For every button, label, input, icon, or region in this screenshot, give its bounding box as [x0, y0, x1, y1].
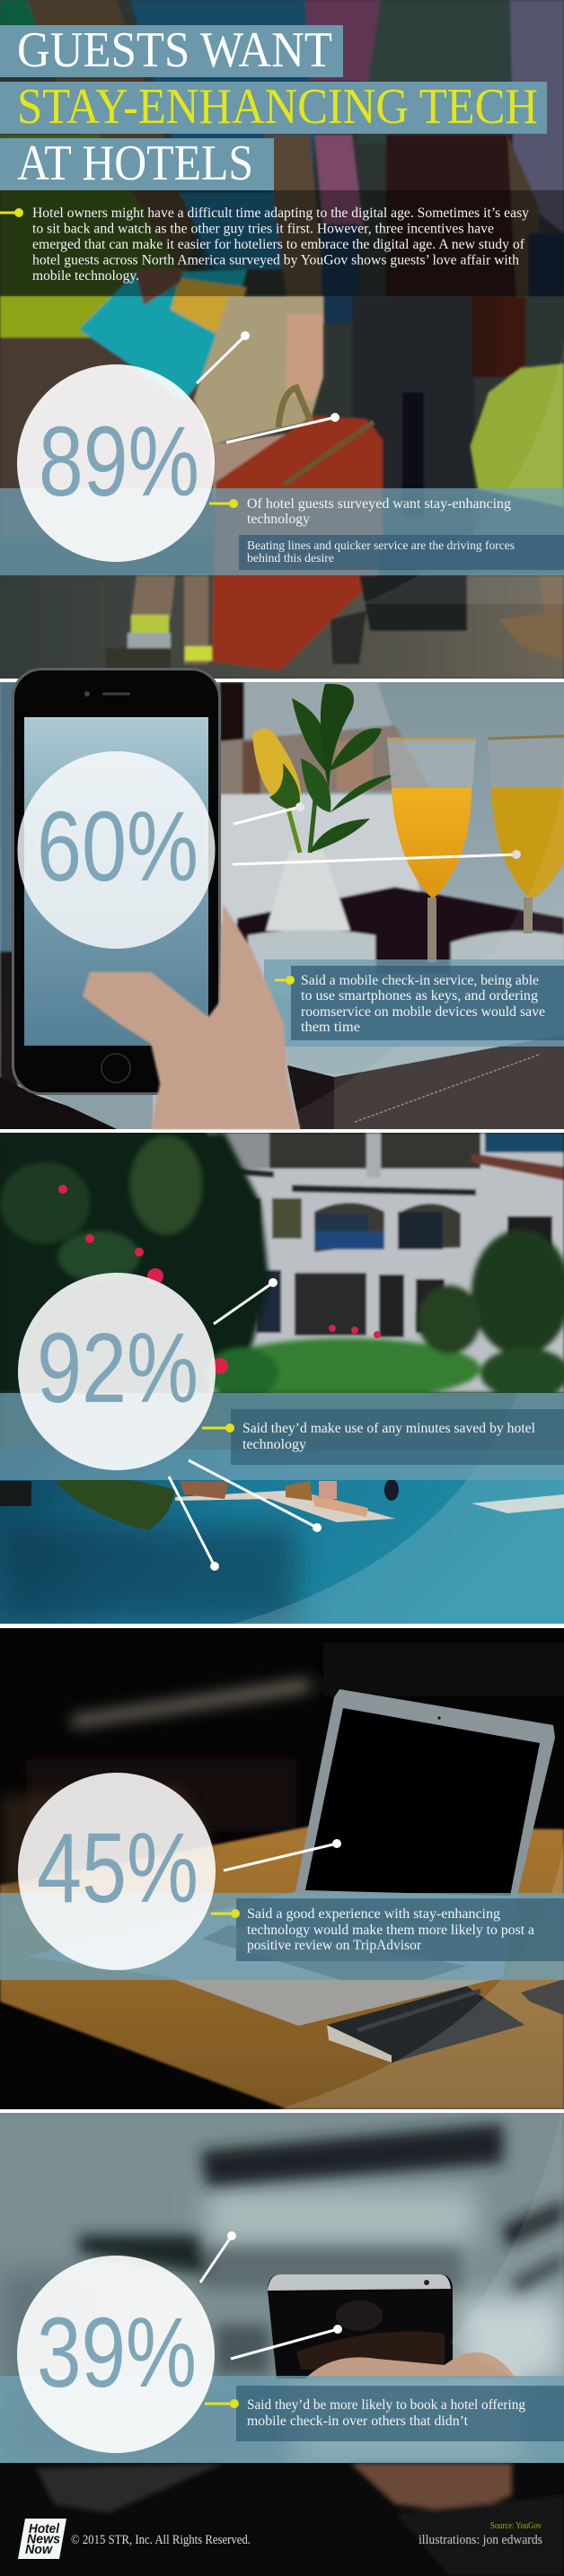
- bathers: [180, 1479, 399, 1517]
- hotel building: [207, 1133, 564, 1393]
- logo: Hotel News Now: Hotel: [29, 2522, 60, 2537]
- icon: phone in hand: [268, 2274, 516, 2379]
- intro text block: mobile technology.: [32, 268, 139, 284]
- band: [0, 1393, 564, 1480]
- stat text: Said they’d make use of any minutes saved by hotel: [242, 1421, 535, 1436]
- keyboard: [202, 1925, 467, 1980]
- bullet: [202, 1424, 234, 1433]
- stat panel: 45%: [0, 1773, 564, 1980]
- sub band: [231, 1409, 564, 1465]
- number: 60%: [37, 792, 198, 902]
- band: [0, 1893, 564, 1980]
- icon: hand: [83, 904, 300, 1129]
- sub band: [236, 1898, 564, 1961]
- intro text block: hotel guests across North America surveyed by YouGov shows guests’ love affair with: [32, 253, 519, 267]
- circle: [17, 2256, 215, 2453]
- intro dark band: [0, 190, 564, 296]
- icon: juice glasses: [387, 736, 564, 962]
- stat text: [242, 1421, 535, 1452]
- number: 45%: [37, 1813, 198, 1923]
- logo: Hotel News Now: News: [27, 2533, 60, 2547]
- stat text: technology: [242, 1437, 306, 1452]
- connector lines: [233, 802, 521, 864]
- bullet: [275, 976, 295, 985]
- sub band: [236, 2386, 564, 2441]
- stat text: roomservice on mobile devices would save: [301, 1004, 545, 1020]
- icon: smartphone: [13, 670, 219, 1093]
- number: 39%: [37, 2298, 197, 2408]
- number: 92%: [37, 1313, 198, 1424]
- icon: notebook and pen: [327, 1986, 524, 2063]
- title: [0, 22, 547, 191]
- number: 89%: [39, 407, 199, 517]
- logo: Hotel News Now: Now: [25, 2543, 54, 2557]
- icon: flower: [252, 684, 395, 853]
- intro text block: [0, 206, 529, 284]
- panel: breakfast tray and phone: [0, 682, 564, 1129]
- foliage: [0, 1133, 564, 1456]
- stat text: Said they’d be more likely to book a hotel offering: [247, 2397, 525, 2413]
- stat text: mobile check-in over others that didn’t: [247, 2414, 469, 2429]
- intro text block: Hotel owners might have a difficult time adapting to the digital age. Sometimes it’s easy: [32, 206, 529, 221]
- panel: guests with luggage: [0, 0, 564, 679]
- stat text: [247, 2397, 525, 2429]
- panel: laptop on table: [0, 1628, 564, 2109]
- stat text: [247, 496, 515, 565]
- band: [0, 2376, 564, 2463]
- stat panel: 92%: [0, 1273, 564, 1571]
- logo: Hotel News Now: [18, 2519, 66, 2559]
- band: [0, 488, 564, 575]
- source: Source: YouGov: [490, 2520, 542, 2531]
- intro text block: to sit back and watch as the other guy tries it first. However, three incentives have: [32, 221, 494, 237]
- stat text: Of hotel guests surveyed want stay-enhancing: [247, 496, 511, 512]
- stat text: technology: [247, 512, 310, 527]
- stat panel: 39%: [0, 2231, 564, 2463]
- circle: [18, 1773, 216, 1970]
- stat text: Said a good experience with stay-enhancing: [247, 1906, 500, 1922]
- stat text: [247, 1906, 534, 1953]
- bullet: [211, 1909, 240, 1918]
- stat text: Said a mobile check-in service, being able: [301, 973, 539, 988]
- connector lines: [169, 1278, 322, 1571]
- sub band: [291, 966, 564, 1040]
- flowers: [58, 1185, 381, 1374]
- stat text: them time: [301, 1020, 360, 1035]
- stat text: to use smartphones as keys, and ordering: [301, 988, 538, 1003]
- stat panel: 89%: [0, 331, 564, 575]
- stat panel: 60%: [18, 751, 564, 1040]
- footer: [18, 2519, 542, 2559]
- panel: hotel pool: [0, 1133, 564, 1624]
- bullet: [209, 499, 238, 508]
- stat text: positive review on TripAdvisor: [247, 1938, 422, 1953]
- connector lines: [197, 331, 339, 442]
- stat text: [301, 973, 545, 1035]
- intro text block: emerged that can make it easier for hoteliers to embrace the digital age. A new study of: [32, 237, 525, 252]
- title bar: guests want: GUESTS WANT: [17, 22, 332, 78]
- panel: person with phone: [0, 2113, 564, 2576]
- circle: [17, 364, 215, 562]
- title bar: at hotels: AT HOTELS: [17, 136, 253, 191]
- band: 60%: [264, 959, 564, 1047]
- stat text: behind this desire: [247, 552, 334, 565]
- copyright: © 2015 STR, Inc. All Rights Reserved.: [71, 2533, 251, 2547]
- credit: illustrations: jon edwards: [419, 2533, 542, 2547]
- stat text: technology would make them more likely to post a: [247, 1923, 534, 1938]
- circle: [18, 1273, 216, 1470]
- bullet: [205, 2399, 239, 2408]
- circle: [18, 751, 216, 949]
- stat text: Beating lines and quicker service are the driving forces: [247, 539, 515, 553]
- connector lines: [200, 2231, 342, 2359]
- connector line: [224, 1839, 341, 1871]
- sub band: [239, 535, 564, 570]
